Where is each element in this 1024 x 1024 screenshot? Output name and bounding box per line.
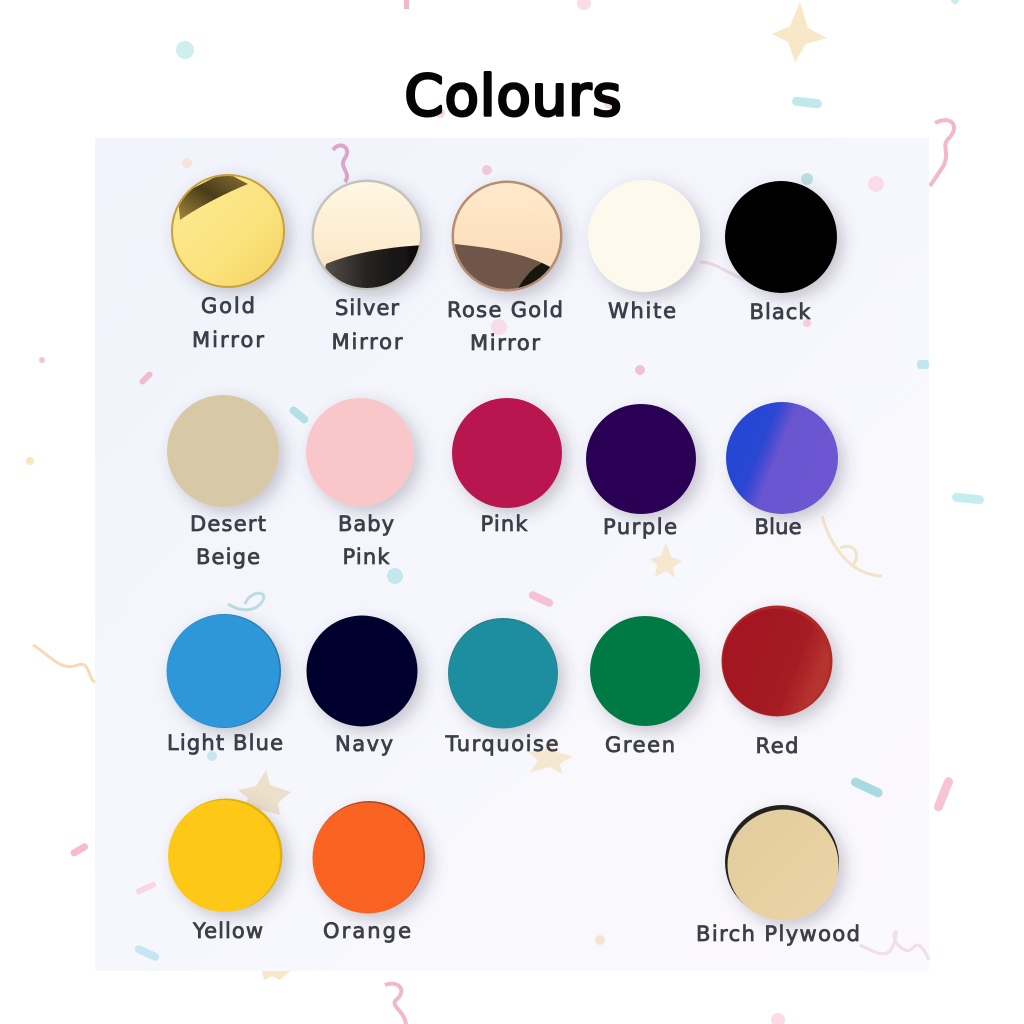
label: Desert Beige: Beige	[196, 545, 260, 569]
panel: colour swatch card	[95, 138, 929, 971]
swatch: Black	[725, 181, 837, 293]
swatch: Birch Plywood	[725, 805, 839, 920]
swatch: Blue	[726, 402, 838, 514]
label: Baby Pink: Baby	[338, 512, 394, 536]
label: Baby Pink: Pink	[342, 545, 390, 569]
swatch: Baby Pink	[306, 398, 414, 506]
label: Gold Mirror: Gold	[201, 294, 255, 318]
swatch: Light Blue	[166, 614, 281, 728]
label: Orange: Orange	[323, 919, 411, 943]
swatch: Navy	[306, 616, 418, 726]
label: Navy: Navy	[335, 732, 393, 756]
swatch: Orange	[312, 801, 425, 914]
label: Gold Mirror: Mirror	[192, 328, 264, 352]
label: Desert Beige: Desert	[190, 512, 266, 536]
swatch: Red	[722, 606, 832, 716]
swatch: Pink	[452, 398, 562, 508]
swatch: Desert Beige	[167, 395, 279, 507]
swatch: Purple	[586, 404, 696, 514]
label: Silver Mirror: Silver	[335, 296, 399, 320]
label: Yellow: Yellow	[192, 919, 263, 943]
title: Colours	[404, 64, 622, 129]
swatch: Silver Mirror	[312, 180, 425, 295]
swatch: Rose Gold Mirror	[452, 180, 562, 295]
label: Red: Red	[756, 734, 798, 758]
label: Rose Gold Mirror: Rose Gold	[447, 298, 563, 322]
label: Turquoise: Turquoise	[444, 732, 558, 756]
label: Light Blue: Light Blue	[167, 731, 283, 755]
label: Black: Black	[750, 300, 811, 324]
label: Green: Green	[605, 733, 675, 757]
label: Silver Mirror: Mirror	[332, 330, 403, 354]
label: Birch Plywood: Birch Plywood	[696, 922, 860, 946]
label: Pink: Pink	[480, 512, 528, 536]
label: Purple: Purple	[603, 515, 677, 539]
swatch: Green	[590, 616, 700, 726]
label: Blue: Blue	[754, 515, 802, 539]
swatch: Yellow	[168, 798, 282, 912]
swatch: Turquoise	[448, 618, 558, 728]
swatch: Gold Mirror	[171, 172, 285, 288]
label: Rose Gold Mirror: Mirror	[470, 331, 540, 355]
label: White: White	[608, 299, 676, 323]
swatch: White	[588, 180, 700, 292]
